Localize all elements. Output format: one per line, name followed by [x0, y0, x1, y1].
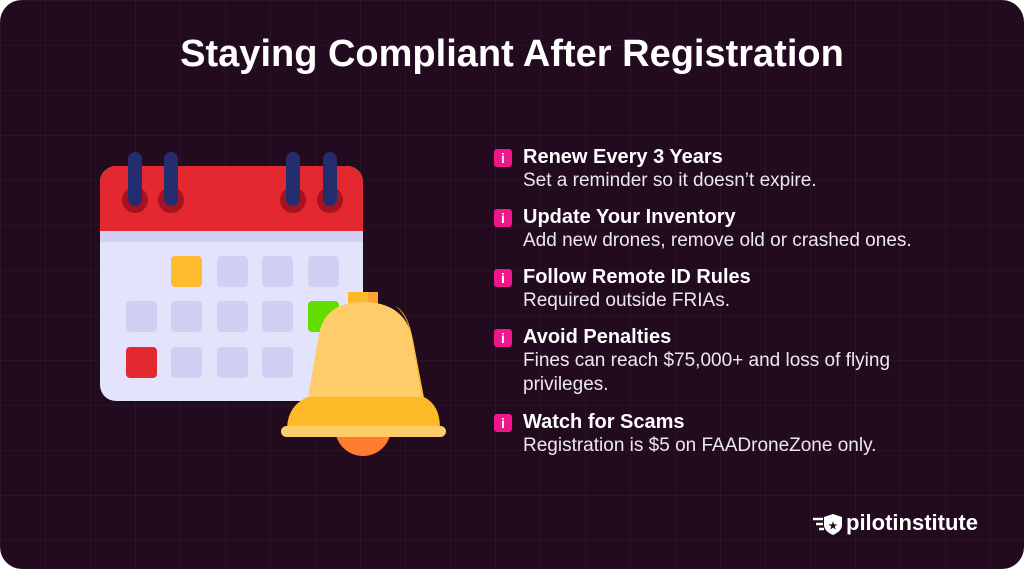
item: renew — [494, 146, 817, 191]
item: renew: i — [501, 150, 505, 166]
item: remote id: Follow Remote ID Rules — [523, 266, 751, 288]
item: remote id: Required outside FRIAs. — [523, 290, 730, 311]
item: scams: Watch for Scams — [523, 411, 685, 433]
item: penalties — [494, 326, 890, 395]
item: inventory: Update Your Inventory — [523, 206, 736, 228]
item: scams: i — [501, 415, 505, 431]
item: penalties: Fines can reach $75,000+ and loss of flying — [523, 350, 890, 371]
illustration: calendar with bell — [100, 152, 446, 456]
item: inventory: i — [501, 210, 505, 226]
item: penalties: i — [501, 330, 505, 346]
item: penalties: privileges. — [523, 374, 609, 395]
calendar — [100, 152, 363, 401]
item: remote id — [494, 266, 751, 311]
item: inventory — [494, 206, 912, 251]
item: renew: Set a reminder so it doesn’t expire. — [523, 170, 817, 191]
bell — [281, 292, 446, 456]
item: renew: Renew Every 3 Years — [523, 146, 723, 168]
logo: ★ — [829, 521, 838, 532]
item: scams — [494, 411, 876, 456]
item: inventory: Add new drones, remove old or crashed ones. — [523, 230, 912, 251]
item: remote id: i — [501, 270, 505, 286]
logo: pilotinstitute — [846, 510, 978, 535]
item: penalties: Avoid Penalties — [523, 326, 671, 348]
title: Staying Compliant After Registration — [180, 33, 844, 75]
item: scams: Registration is $5 on FAADroneZone only. — [523, 435, 876, 456]
